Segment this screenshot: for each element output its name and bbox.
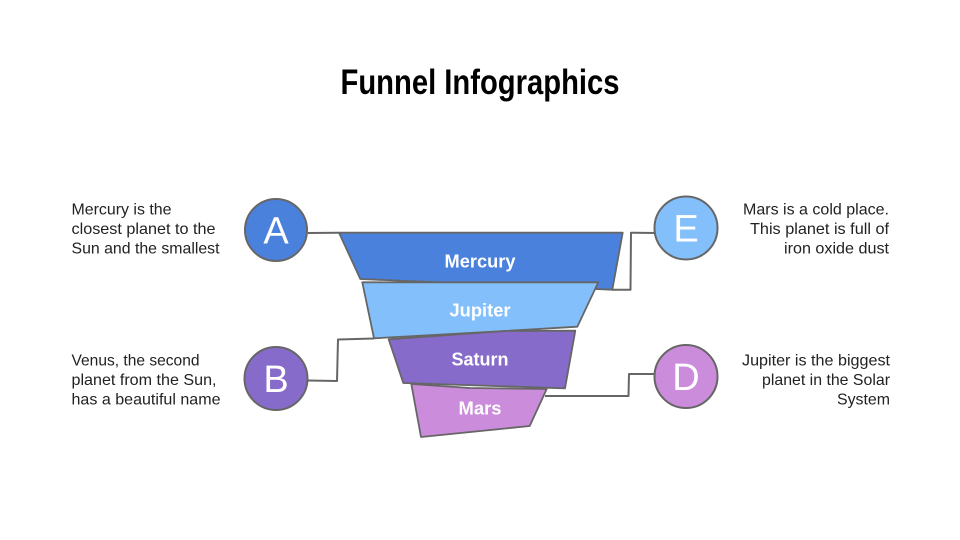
badge E [654, 196, 718, 260]
text: Mercury description [72, 202, 220, 258]
text: Jupiter description: planet in the Solar [762, 372, 891, 389]
text: Venus description: planet from the Sun, [72, 372, 217, 389]
text: Mars description: Mars is a cold place. [743, 202, 889, 218]
text: Venus description [72, 352, 221, 408]
connector: D to Mars [545, 374, 656, 396]
badge B [244, 347, 308, 410]
text: Jupiter description: System [837, 392, 890, 408]
connector: E to Mercury [612, 233, 656, 290]
text: Venus description: has a beautiful name [72, 392, 221, 408]
funnel segment: Mars: Mars [458, 398, 502, 418]
funnel segment: Saturn [389, 331, 575, 388]
text: Venus description: Venus, the second [72, 352, 200, 370]
funnel segment: Jupiter [362, 282, 598, 338]
funnel segment: Saturn: Saturn [452, 348, 508, 370]
text: Mercury description: Mercury is the [72, 202, 172, 218]
title: Funnel Infographics [340, 63, 620, 102]
funnel [339, 233, 623, 437]
text: Mercury description: closest planet to the [72, 221, 216, 238]
connector: B to Jupiter [308, 338, 374, 381]
badge A: A [263, 210, 289, 252]
text: Mars description [743, 202, 890, 258]
badge D [654, 345, 718, 408]
text: Jupiter description [742, 352, 891, 408]
text: Mercury description: Sun and the smallest [72, 240, 220, 258]
text: Mars description: iron oxide dust [784, 240, 890, 258]
badge A [245, 199, 307, 261]
funnel segment: Mercury [339, 233, 623, 290]
text: Mars description: This planet is full of [750, 221, 890, 238]
funnel segment: Mercury: Mercury [444, 250, 516, 272]
connector: A to Mercury [308, 232, 339, 234]
badge B: B [263, 359, 289, 401]
text: Jupiter description: Jupiter is the biggest [742, 352, 891, 370]
funnel segment: Mars [411, 384, 547, 437]
badge E: E [673, 208, 699, 250]
funnel segment: Jupiter: Jupiter [450, 300, 510, 320]
badge D: D [672, 357, 700, 399]
